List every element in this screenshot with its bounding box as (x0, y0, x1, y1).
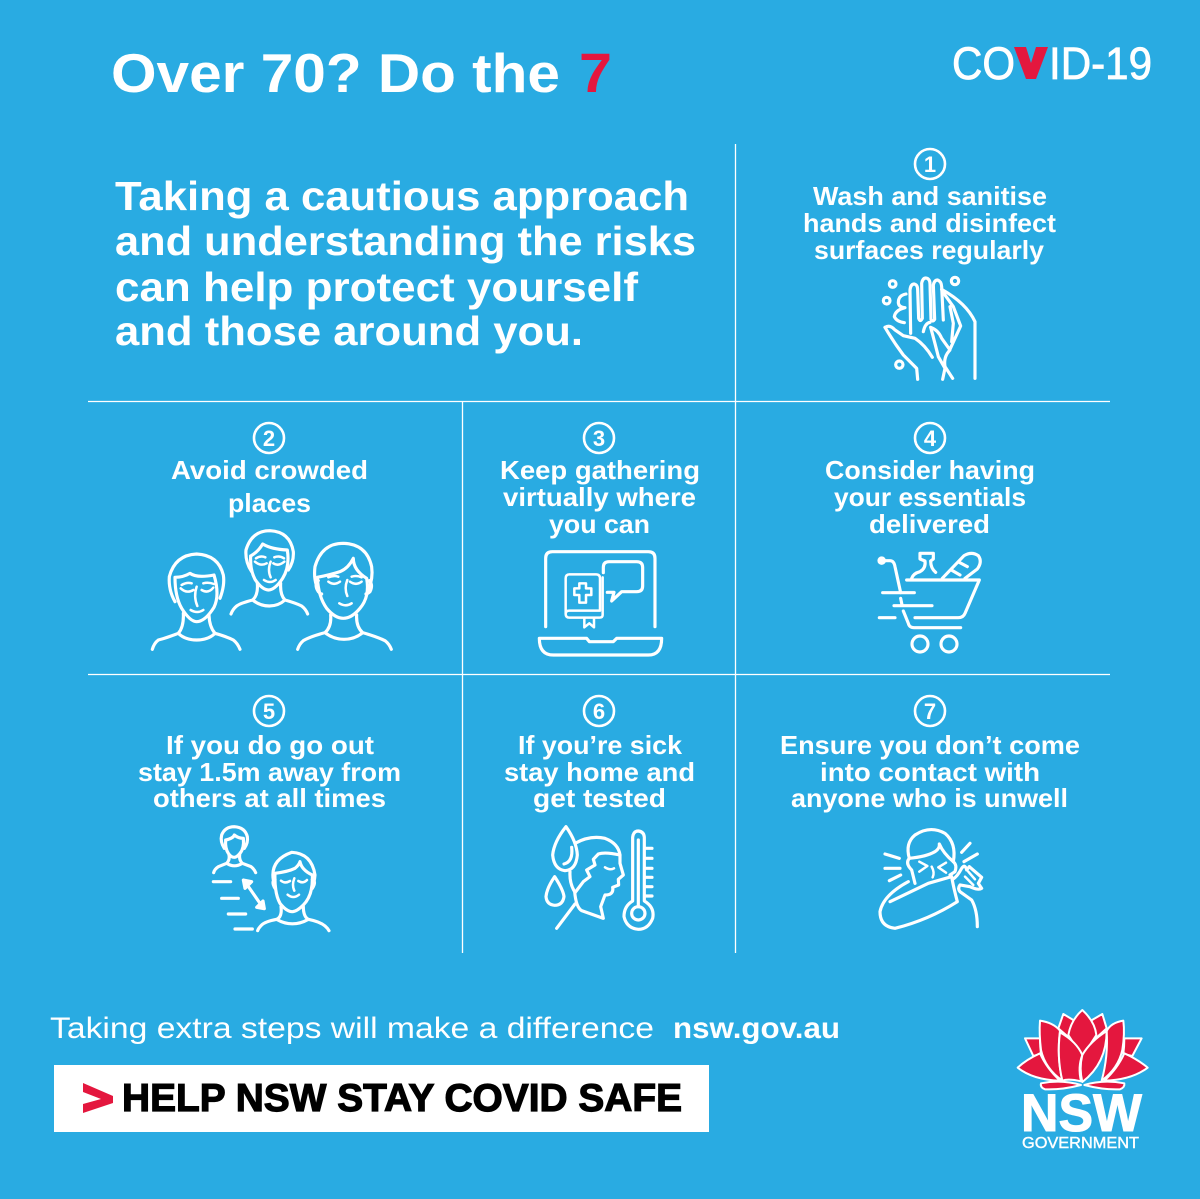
panel: step 4 essentials delivered (825, 423, 1035, 652)
panel: step 5 stay 1.5m away: others at all times (153, 783, 386, 813)
panel: step 6 stay home if sick: stay home and (504, 757, 695, 787)
panel: step 4 essentials delivered: Consider having (825, 455, 1035, 485)
panel: step 3 gather virtually: virtually where (503, 482, 696, 512)
title: 7 (579, 41, 612, 104)
panel: step 3 gather virtually: Keep gathering (500, 455, 700, 485)
logo: COVID-19 (952, 38, 1152, 89)
panel: step 7 avoid unwell people: Ensure you don’t come (780, 730, 1080, 760)
panel: step 5 stay 1.5m away: If you do go out (166, 730, 374, 760)
panel: step 2 avoid crowded places: 2 (263, 426, 275, 451)
panel: step 6 stay home if sick: If you’re sick (518, 730, 683, 760)
panel: step 7 avoid unwell people: anyone who is unwell (791, 783, 1068, 813)
panel: step 6 stay home if sick (504, 696, 695, 929)
panel: step 5 stay 1.5m away (138, 696, 401, 931)
icon: shopping cart (879, 553, 980, 652)
icon: laptop with bible and speech bubble (539, 552, 662, 655)
icon: washing hands (883, 277, 975, 379)
icon: waratah flower (1018, 1010, 1148, 1089)
icon: person coughing into elbow (880, 830, 982, 928)
intro text block: Taking a cautious approach (115, 173, 689, 219)
banner: help NSW stay COVID safe (54, 1065, 709, 1132)
intro text block: and understanding the risks (115, 218, 696, 264)
panel: step 4 essentials delivered: delivered (869, 509, 990, 539)
panel: step 7 avoid unwell people (780, 696, 1080, 928)
panel: step 3 gather virtually: 3 (593, 426, 605, 451)
panel: step 1 wash hands: surfaces regularly (814, 235, 1045, 265)
panel: step 1 wash hands (803, 149, 1056, 379)
logo: NSW Government waratah (1018, 1010, 1148, 1152)
panel: step 1 wash hands: Wash and sanitise (813, 181, 1047, 211)
footer tagline: nsw.gov.au (673, 1012, 840, 1045)
panel: step 6 stay home if sick: 6 (593, 699, 605, 724)
panel: step 4 essentials delivered: 4 (924, 426, 937, 451)
footer tagline (50, 1012, 840, 1045)
panel: step 1 wash hands: 1 (924, 152, 936, 177)
icon: two people at a distance (213, 827, 329, 931)
panel: step 7 avoid unwell people: into contact with (820, 757, 1040, 787)
panel: step 5 stay 1.5m away: stay 1.5m away from (138, 757, 401, 787)
panel: step 7 avoid unwell people: 7 (924, 699, 936, 724)
panel: step 3 gather virtually: you can (549, 509, 650, 539)
title: Over 70? Do the (111, 42, 560, 104)
panel: step 5 stay 1.5m away: 5 (263, 699, 275, 724)
banner: help NSW stay COVID safe: HELP NSW STAY COVID SAFE (122, 1077, 682, 1120)
icon: red chevron (83, 1083, 113, 1113)
intro text block: and those around you. (115, 308, 583, 354)
icon: fever with thermometer (546, 827, 653, 929)
logo: NSW Government waratah: NSW (1021, 1084, 1142, 1143)
panel: step 2 avoid crowded places (152, 423, 391, 649)
panel: step 1 wash hands: hands and disinfect (803, 208, 1056, 238)
icon: three people (152, 531, 391, 649)
logo: COVID-19: ID-19 (1049, 38, 1152, 89)
panel: step 4 essentials delivered: your essentials (834, 482, 1026, 512)
logo: COVID-19: CO (952, 38, 1015, 89)
panel: step 2 avoid crowded places: places (228, 488, 311, 518)
footer tagline: Taking extra steps will make a difference (50, 1012, 654, 1045)
panel: step 3 gather virtually (500, 423, 700, 655)
intro text block (115, 173, 696, 354)
panel: step 6 stay home if sick: get tested (533, 783, 666, 813)
intro text block: can help protect yourself (115, 264, 638, 310)
logo: NSW Government waratah: GOVERNMENT (1022, 1135, 1140, 1152)
panel: step 2 avoid crowded places: Avoid crowded (171, 455, 368, 485)
